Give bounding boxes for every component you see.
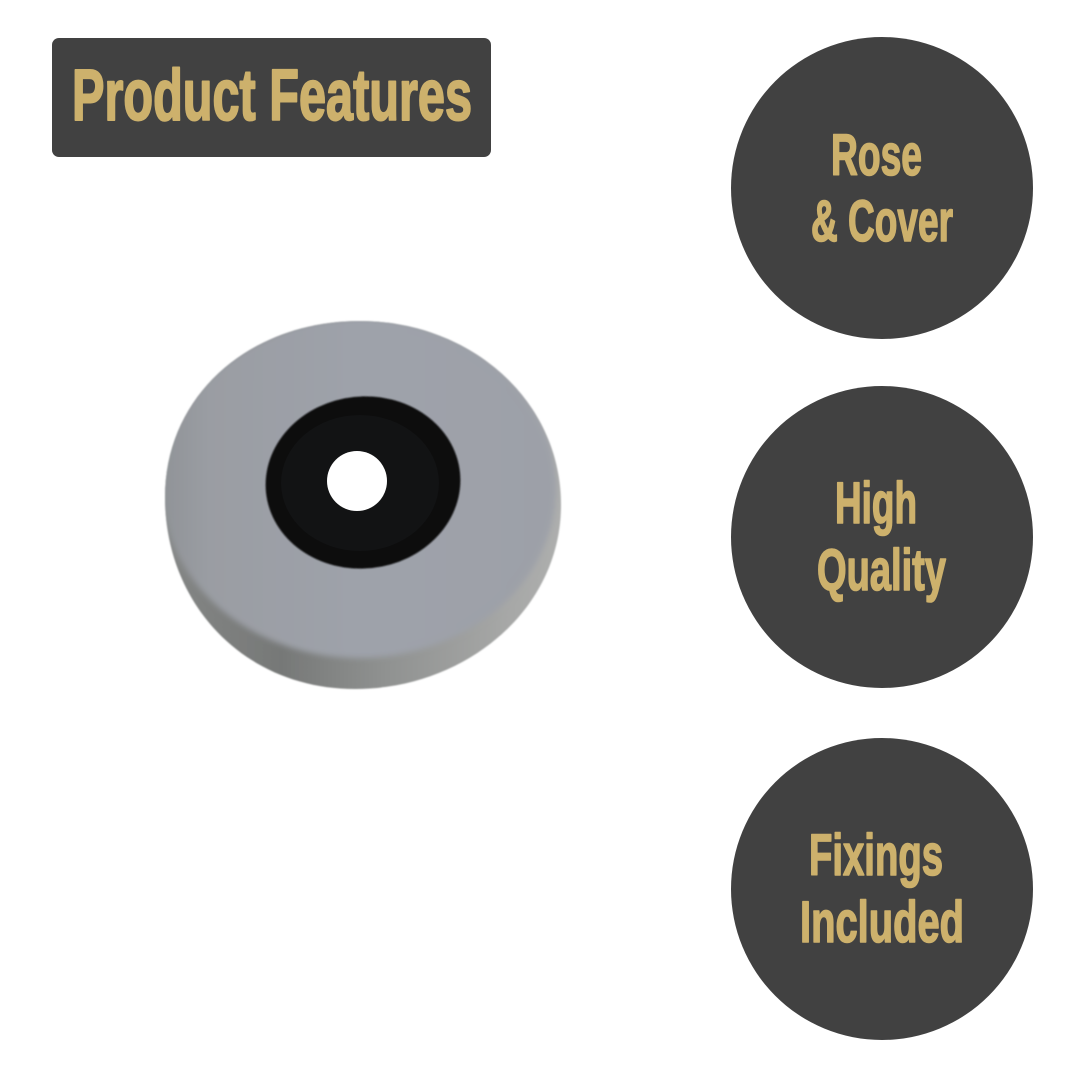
black centre insert [257, 387, 469, 578]
feature badge: Rose & Cover [731, 37, 1033, 339]
centre hole [327, 451, 387, 511]
badge text: Included: Included [800, 890, 964, 955]
badge text: Fixings: Fixings [809, 823, 943, 888]
feature badge: Fixings Included [731, 738, 1033, 1040]
front face of the cover [162, 318, 556, 658]
title banner [52, 38, 491, 157]
badge text: High: High [835, 471, 917, 536]
badge text: Quality: Quality [817, 538, 946, 603]
badge text: Rose: Rose [831, 123, 922, 188]
product image: round rose and cover [160, 315, 566, 695]
side wall of the cover [160, 315, 566, 695]
feature badge: High Quality [731, 386, 1033, 688]
title text: Product Features [72, 56, 472, 136]
badge text: & Cover: & Cover [811, 189, 953, 254]
